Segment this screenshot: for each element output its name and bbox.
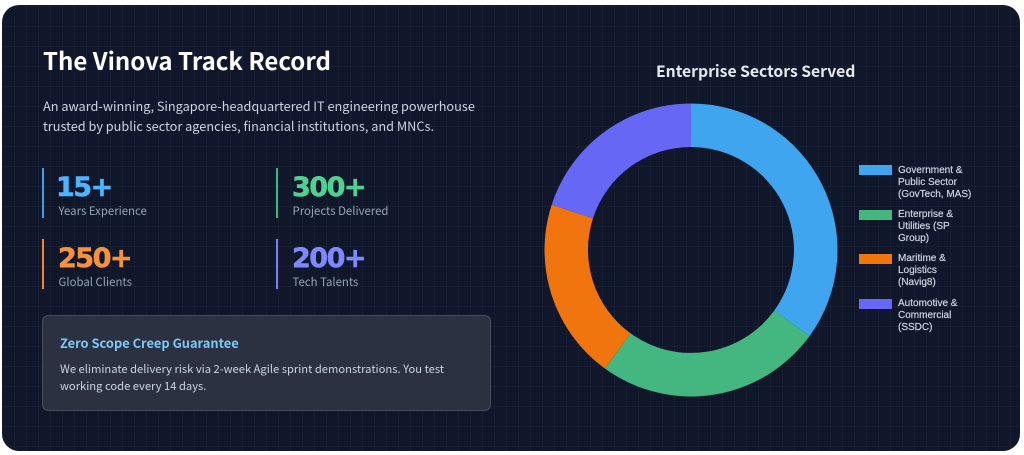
legend: maritime: (Navig8): [898, 277, 936, 288]
callout: zero scope creep guarantee: [42, 315, 491, 411]
stat: years experience: Years Experience: [58, 203, 147, 219]
stat: global clients: [42, 239, 242, 289]
legend: maritime: Maritime &: [898, 253, 946, 264]
callout heading: Zero Scope Creep Guarantee: [60, 333, 239, 352]
callout body: [60, 361, 444, 394]
legend: maritime: [859, 253, 946, 288]
slice: maritime 20%: [545, 205, 630, 368]
intro text: trusted by public sector agencies, financial institutions, and MNCs.: [43, 116, 434, 135]
slice: government 35%: [691, 104, 837, 336]
legend: government: Government &: [898, 165, 962, 176]
legend: enterprise: [859, 208, 953, 244]
stat: tech talents: Tech Talents: [292, 274, 358, 290]
stat: projects delivered: 300+: [292, 172, 365, 203]
intro text: An award-winning, Singapore-headquartered IT engineering powerhouse: [43, 96, 475, 115]
stat: global clients: Global Clients: [58, 274, 132, 290]
callout body: We eliminate delivery risk via 2-week Agile sprint demonstrations. You test: [60, 361, 444, 377]
legend: enterprise: Enterprise &: [898, 208, 953, 220]
legend: government: (GovTech, MAS): [898, 189, 971, 200]
legend: automotive: (SSDC): [898, 322, 932, 332]
stat: years experience: 15+: [56, 172, 112, 203]
title: The Vinova Track Record: [43, 42, 331, 77]
legend: enterprise: Utilities (SP: [898, 220, 950, 232]
legend: enterprise: Group): [898, 232, 929, 244]
legend: maritime: Logistics: [898, 265, 937, 276]
stat: tech talents: 200+: [292, 243, 365, 274]
stat: tech talents: [276, 239, 476, 289]
stat: projects delivered: Projects Delivered: [292, 203, 388, 219]
intro text: [43, 96, 475, 135]
callout body: working code every 14 days.: [60, 378, 206, 394]
legend: government: Public Sector: [898, 177, 957, 188]
legend: automotive: Automotive &: [898, 298, 957, 308]
chart title: Enterprise Sectors Served: [656, 59, 855, 82]
stat: projects delivered: [276, 168, 476, 218]
stat: years experience: [42, 168, 242, 218]
legend: automotive: [859, 298, 958, 332]
donut chart: [544, 104, 838, 396]
legend: government: [859, 165, 971, 200]
slice: automotive 20%: [552, 104, 691, 218]
slice: enterprise 25%: [605, 310, 810, 396]
legend: automotive: Commercial: [898, 310, 951, 320]
stat: global clients: 250+: [58, 243, 131, 274]
